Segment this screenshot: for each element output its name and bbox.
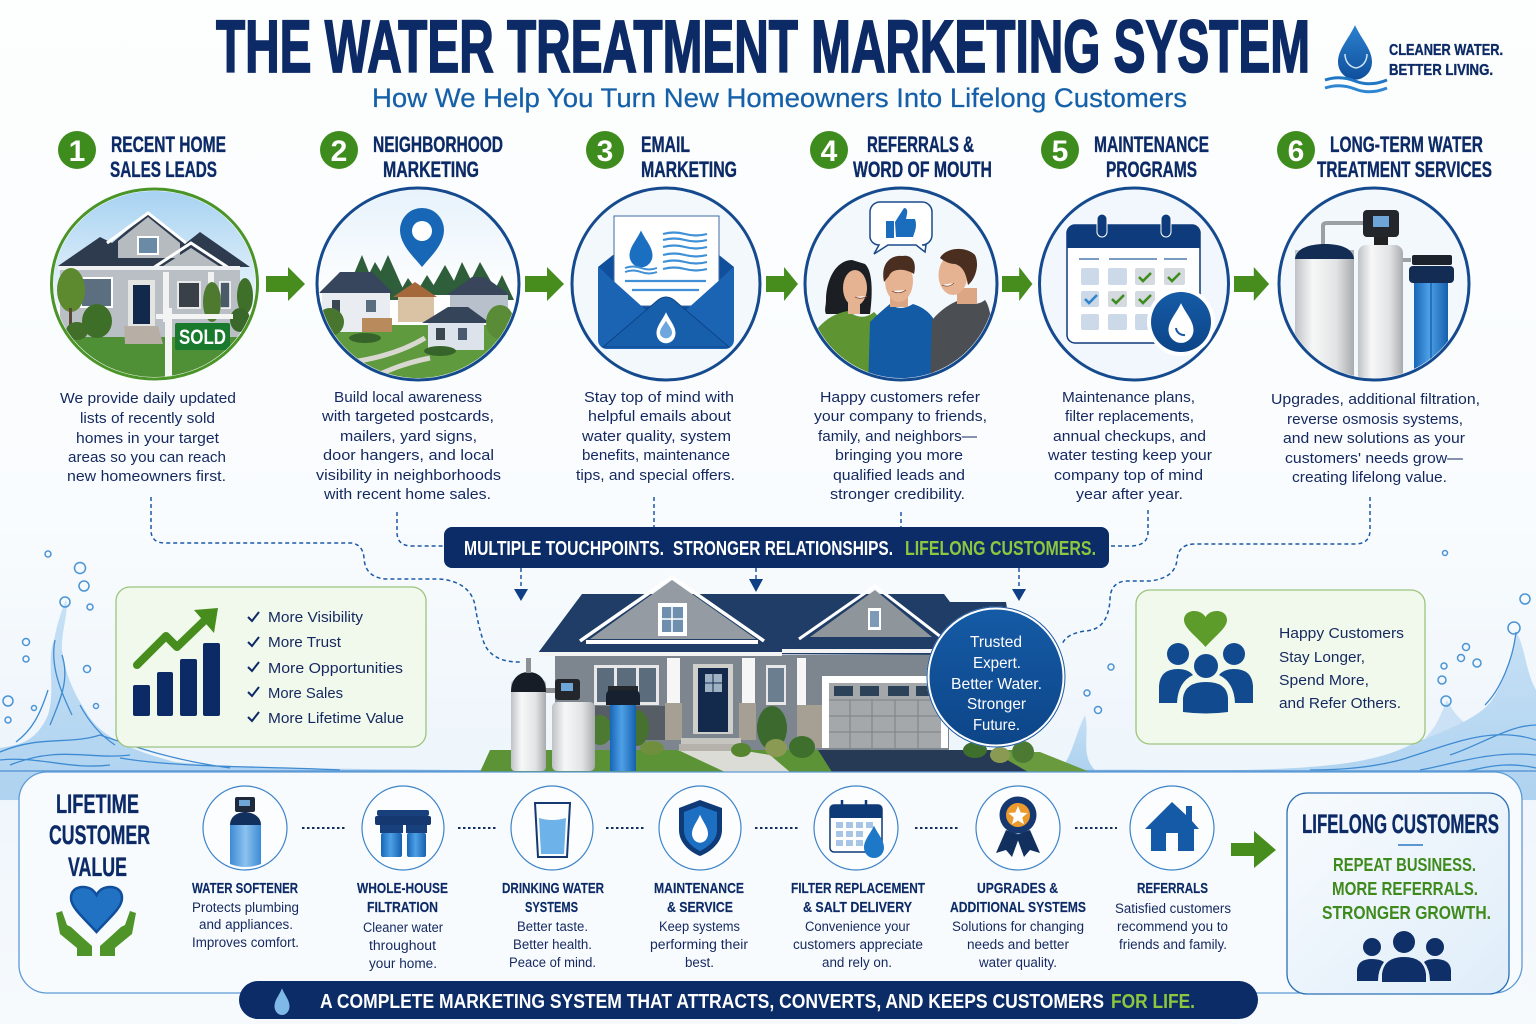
step 2 heading: 2 [331,135,347,168]
icon: customers group [1357,931,1451,982]
icon: heart in hands [56,887,136,956]
step 5 heading: MAINTENANCE [1094,132,1209,157]
item: referrals: Satisfied customers [1115,901,1231,916]
text: step 6: Upgrades, additional filtration, [1271,391,1480,408]
item: whole-house filtration: FILTRATION [367,899,438,916]
arrow 2 [525,267,564,301]
item: referrals: friends and family. [1119,937,1227,952]
text: step 5: annual checkups, and [1053,428,1206,445]
item: water softener [192,786,299,950]
image: sold home [50,188,260,386]
text: step 6: and new solutions as your [1283,430,1465,447]
text: step 6: customers' needs grow— [1285,450,1463,467]
step 6 heading [1277,131,1492,182]
heading: lifetime customer value [49,789,150,882]
panel: lifetime customer value [19,772,1522,993]
item: upgrades: UPGRADES & [977,880,1058,897]
text: step 5: water testing keep your [1047,447,1212,464]
step 4 heading: 4 [821,135,838,168]
badge: trusted expert: Better Water. [951,676,1042,693]
checklist: More Sales [268,685,343,702]
item: upgrades: water quality. [978,955,1057,970]
checklist: More Visibility [268,609,364,626]
item: water softener: and appliances. [199,917,293,932]
step 2 heading: NEIGHBORHOOD [373,132,503,157]
item: whole-house filtration: throughout [369,938,436,953]
item: upgrades: Solutions for changing [952,919,1084,934]
item: drinking water systems: Peace of mind. [509,955,596,970]
step 4 heading: WORD OF MOUTH [853,157,992,182]
panel: lifelong customers: STRONGER GROWTH. [1322,903,1491,923]
step 3 heading: MARKETING [641,157,737,182]
item: upgrades: ADDITIONAL SYSTEMS [950,899,1086,916]
item: whole-house filtration: WHOLE-HOUSE [357,880,448,897]
panel: happy customers: Happy Customers [1279,625,1404,642]
checklist: More Opportunities [268,660,403,677]
item: maintenance and service: MAINTENANCE [654,880,744,897]
text: step 4: stronger credibility. [830,486,965,503]
panel: lifelong customers [1287,793,1509,994]
text: step 3: tips, and special offers. [576,467,735,484]
banner: multiple touchpoints [444,527,1109,568]
subtitle: How We Help You Turn New Homeowners Into Lifelong Customers [372,83,1187,113]
step 2 heading: MARKETING [383,157,479,182]
icon: growth chart [133,608,220,716]
heading: lifetime customer value: CUSTOMER [49,820,150,850]
text: step 2: door hangers, and local [323,447,494,464]
text: step 4: qualified leads and [833,467,965,484]
step 6 heading: 6 [1288,135,1304,168]
image: email envelope [572,188,760,380]
text: step 5: company top of mind [1054,467,1203,484]
item: maintenance and service: Keep systems [659,919,740,934]
central house illustration [480,577,1090,772]
badge: trusted expert: Future. [973,717,1020,734]
text: step 4: Happy customers refer [820,389,980,406]
text: step 3: water quality, system [581,428,731,445]
text: step 3 [576,389,735,484]
step 3 heading [586,131,737,182]
step 5 heading [1041,131,1209,182]
step 2 heading [320,131,503,182]
item: referrals: REFERRALS [1137,880,1208,897]
badge: trusted expert [927,607,1065,747]
text: step 1: new homeowners first. [67,468,226,485]
step 3 heading: 3 [597,135,613,168]
text: step 2 [316,389,501,503]
banner: multiple touchpoints: STRONGER RELATIONSHIPS. [673,538,893,560]
item: water softener: Protects plumbing [192,900,299,915]
item: drinking water systems: DRINKING WATER [502,880,604,897]
item: upgrades [950,786,1086,970]
image: sold home: SOLD [179,326,226,349]
heading: lifetime customer value: LIFETIME [56,789,139,819]
item: drinking water systems: SYSTEMS [525,899,578,916]
text: step 2: with recent home sales. [323,486,491,503]
item: maintenance and service: & SERVICE [667,899,733,916]
item: water softener: Improves comfort. [192,935,299,950]
step 1 heading: 1 [69,135,85,168]
icon: heart and people [1159,611,1253,714]
banner: multiple touchpoints: MULTIPLE TOUCHPOINTS. [464,538,664,560]
item: filter replacement: & SALT DELIVERY [803,899,912,916]
item: water softener: WATER SOFTENER [192,880,298,897]
arrow 1 [266,267,305,301]
step 5 heading: 5 [1052,135,1068,168]
logo: cleaner water better living [1325,25,1503,92]
item: referrals: recommend you to [1117,919,1228,934]
checklist: More Trust [268,634,342,651]
image: maintenance calendar [1040,188,1228,380]
text: step 1: We provide daily updated [60,390,236,407]
text: step 6: reverse osmosis systems, [1287,411,1463,428]
text: step 3: Stay top of mind with [584,389,734,406]
panel: happy customers: Spend More, [1279,672,1369,689]
step 4 heading: REFERRALS & [867,132,974,157]
heading: lifetime customer value: VALUE [68,852,127,882]
text: step 5: Maintenance plans, [1062,389,1195,406]
step 3 heading: EMAIL [641,132,690,157]
arrow to lifelong customers [1231,831,1276,868]
item: whole-house filtration [357,786,448,971]
item: drinking water systems: Better taste. [517,919,588,934]
panel: lifelong customers: MORE REFERRALS. [1332,879,1478,899]
arrow 4 [1002,267,1032,301]
logo: cleaner water better living: CLEANER WATER. [1389,42,1503,59]
badge: trusted expert: Expert. [973,655,1021,672]
item: filter replacement: Convenience your [805,919,910,934]
step 4 heading [810,131,992,182]
panel: happy customers: Stay Longer, [1279,649,1365,666]
image: referral people [805,188,997,390]
panel: happy customers: and Refer Others. [1279,695,1401,712]
text: step 6 [1271,391,1480,486]
banner: complete marketing system [239,981,1258,1019]
item: maintenance and service: performing their [650,937,749,952]
text: step 1: areas so you can reach [68,449,226,466]
item: drinking water systems: Better health. [513,937,592,952]
item: filter replacement [791,786,925,970]
text: step 2: mailers, yard signs, [340,428,477,445]
text: step 2: Build local awareness [334,389,482,406]
panel: happy customers [1136,590,1425,744]
badge: trusted expert: Trusted [970,634,1022,651]
panel: lifelong customers: REPEAT BUSINESS. [1333,855,1476,875]
dotted links [302,827,1117,829]
text: step 5 [1047,389,1212,503]
water splash right [1020,550,1536,800]
text: step 4: your company to friends, [814,408,987,425]
text: step 1: lists of recently sold [80,410,215,427]
arrow 3 [766,267,798,301]
text: step 2: visibility in neighborhoods [316,467,501,484]
step 5 heading: PROGRAMS [1106,157,1197,182]
text: step 4 [814,389,987,503]
dashed connectors [151,497,1370,662]
water splash left [0,551,520,800]
text: step 4: bringing you more [835,447,963,464]
step 1 heading: SALES LEADS [110,157,217,182]
text: step 3: helpful emails about [588,408,732,425]
text: step 2: with targeted postcards, [321,408,494,425]
arrow 5 [1234,267,1269,301]
text: step 5: filter replacements, [1065,408,1194,425]
text: step 1 [60,390,236,485]
item: upgrades: needs and better [967,937,1069,952]
down arrows [514,579,1026,601]
item: whole-house filtration: Cleaner water [363,920,443,935]
text: step 4: family, and neighbors— [818,428,977,445]
text: step 1: homes in your target [76,430,220,447]
item: referrals [1115,786,1231,952]
step 1 heading: RECENT HOME [111,132,226,157]
banner: multiple touchpoints: LIFELONG CUSTOMERS. [905,538,1096,560]
logo: cleaner water better living: BETTER LIVING. [1389,62,1493,79]
panel: benefits checklist [116,587,426,747]
badge: trusted expert: Stronger [967,696,1027,713]
image: water treatment system [1279,188,1469,385]
banner: complete marketing system: FOR LIFE. [1111,991,1195,1013]
image: neighborhood pin [316,188,520,385]
item: maintenance and service [650,786,749,970]
item: filter replacement: customers appreciate [793,937,923,952]
item: drinking water systems [502,786,604,970]
text: step 5: year after year. [1076,486,1183,503]
banner: complete marketing system: A COMPLETE MARKETING SYSTEM THAT ATTRACTS, CONVERTS, AND KEEPS CUSTOMERS [320,991,1104,1013]
item: filter replacement: and rely on. [822,955,892,970]
item: filter replacement: FILTER REPLACEMENT [791,880,925,897]
checklist [248,609,404,727]
item: maintenance and service: best. [685,955,714,970]
checklist: More Lifetime Value [268,710,404,727]
step 1 heading [58,131,226,182]
item: whole-house filtration: your home. [369,956,437,971]
text: step 3: benefits, maintenance [582,447,730,464]
text: step 6: creating lifelong value. [1292,469,1447,486]
water system by house [511,658,640,771]
